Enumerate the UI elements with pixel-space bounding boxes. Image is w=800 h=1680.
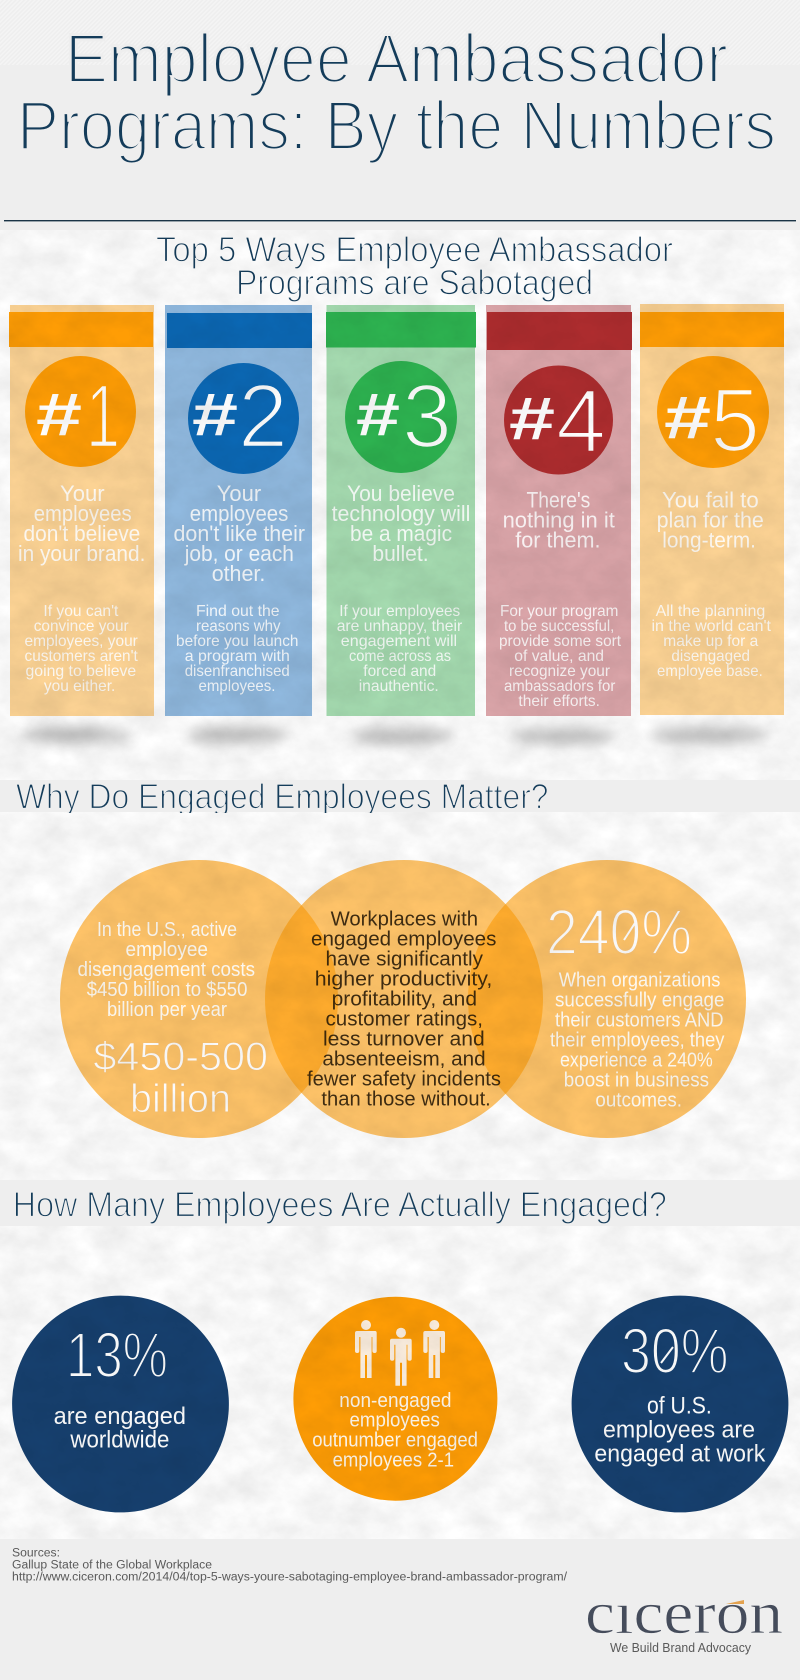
venn right text: boost in business bbox=[564, 1070, 709, 1092]
number badge 2 bbox=[192, 367, 288, 467]
venn right text: 240% bbox=[546, 896, 692, 968]
body 1: customers aren't bbox=[24, 648, 138, 665]
headline 1 bbox=[18, 481, 145, 566]
body 4: of value, and bbox=[514, 648, 604, 665]
number badge 1: # bbox=[36, 381, 82, 448]
stat caption: employees 2-1 bbox=[333, 1449, 454, 1472]
headline 4: nothing in it bbox=[503, 508, 615, 533]
heading: top 5 ways: Programs are Sabotaged bbox=[236, 264, 593, 303]
headline 5 bbox=[657, 488, 764, 553]
body 2: employees. bbox=[198, 678, 276, 695]
venn left text: billion bbox=[130, 1077, 231, 1121]
body 5: make up for a bbox=[663, 633, 758, 650]
venn centre text: less turnover and bbox=[323, 1029, 485, 1051]
panel: #2 employees don't like their job bbox=[165, 305, 312, 716]
number badge 5 bbox=[664, 371, 760, 471]
number badge 4: # bbox=[509, 385, 555, 452]
headline 4: There's bbox=[526, 488, 590, 513]
headline 3: technology will bbox=[332, 501, 470, 526]
logo: ciceron bbox=[588, 1600, 782, 1654]
heading: how many engaged: How Many Employees Are Actually Engaged? bbox=[13, 1185, 667, 1224]
stat circle: 30%: engaged at work bbox=[594, 1441, 766, 1468]
number badge 1 bbox=[36, 367, 120, 467]
body 1: employees, your bbox=[24, 633, 138, 650]
venn right text: their employees, they bbox=[550, 1030, 724, 1052]
body 2: Find out the bbox=[196, 603, 280, 620]
body 4: provide some sort bbox=[499, 633, 622, 650]
body 4: For your program bbox=[500, 603, 618, 620]
body 2: before you launch bbox=[176, 633, 298, 650]
body 4: to be successful, bbox=[504, 618, 614, 635]
venn centre text: have significantly bbox=[326, 949, 483, 971]
body 4: ambassadors for bbox=[504, 678, 616, 695]
heading: top 5 ways: Top 5 Ways Employee Ambassador bbox=[156, 231, 673, 270]
number badge 5: # bbox=[664, 384, 711, 451]
venn right text: outcomes. bbox=[595, 1090, 682, 1112]
stat circle: 30%: of U.S. bbox=[647, 1392, 712, 1419]
stat caption bbox=[312, 1389, 478, 1472]
venn centre text: engaged employees bbox=[311, 929, 496, 951]
headline 4: for them. bbox=[515, 528, 600, 553]
number badge 3: 3 bbox=[402, 367, 452, 467]
logo: ciceron: ciceron bbox=[585, 1580, 783, 1646]
headline 1: don't believe bbox=[24, 521, 140, 546]
headline 5: plan for the bbox=[657, 508, 764, 533]
headline 3: be a magic bbox=[350, 521, 452, 546]
body 2: reasons why bbox=[196, 618, 281, 635]
venn left text: employee bbox=[126, 939, 208, 961]
venn left text: $450 billion to $550 bbox=[87, 979, 247, 1001]
venn diagram bbox=[60, 860, 746, 1138]
venn right text bbox=[546, 896, 724, 1112]
headline 3 bbox=[332, 481, 470, 566]
number badge 4 bbox=[509, 372, 606, 472]
stat circle: 13%: worldwide bbox=[69, 1427, 169, 1454]
headline 5: You fail to bbox=[662, 488, 759, 513]
body 5 bbox=[652, 603, 772, 680]
venn centre text: higher productivity, bbox=[315, 969, 492, 991]
sources: Gallup State of the Global Workplace bbox=[12, 1560, 212, 1572]
body 3: inauthentic. bbox=[359, 678, 439, 695]
heading: top 5 ways bbox=[156, 231, 673, 303]
stat caption: employees bbox=[350, 1409, 440, 1432]
venn centre text: than those without. bbox=[321, 1089, 491, 1111]
headline 3: bullet. bbox=[372, 541, 429, 566]
body 1 bbox=[24, 603, 138, 695]
body 3 bbox=[337, 603, 463, 695]
stat circle: non-engaged 2-1 bbox=[293, 1297, 497, 1501]
body 3: If your employees bbox=[339, 603, 460, 620]
body 5: employee base. bbox=[657, 663, 763, 680]
venn centre text bbox=[307, 909, 501, 1111]
title bbox=[17, 20, 776, 164]
headline 2: job, or each bbox=[184, 541, 294, 566]
body 3: come across as bbox=[349, 648, 451, 665]
body 4 bbox=[499, 603, 622, 710]
venn right text: successfully engage bbox=[555, 990, 724, 1012]
icon: three employees bbox=[355, 1320, 445, 1386]
number badge 2: # bbox=[192, 381, 238, 448]
body 4: their efforts. bbox=[518, 693, 600, 710]
venn centre text: profitability, and bbox=[332, 989, 477, 1011]
venn left text: disengagement costs bbox=[78, 959, 255, 981]
venn left text: billion per year bbox=[107, 999, 227, 1021]
stat circle: 30%: 30% bbox=[621, 1315, 729, 1387]
column shadows bbox=[20, 727, 770, 744]
venn centre text: customer ratings, bbox=[326, 1009, 483, 1031]
paper texture overlay bbox=[0, 230, 800, 1540]
body 1: going to believe bbox=[26, 663, 136, 680]
body 5: All the planning bbox=[656, 603, 765, 620]
number badge 3 bbox=[356, 367, 452, 467]
number badge 3: # bbox=[356, 381, 400, 448]
venn centre text: absenteeism, and bbox=[322, 1049, 486, 1071]
body 4: recognize your bbox=[509, 663, 611, 680]
body 2: disenfranchised bbox=[185, 663, 290, 680]
panel: #1 your employees don't believe bbox=[9, 305, 154, 716]
body 1: you either. bbox=[44, 678, 115, 695]
headline 2 bbox=[174, 481, 305, 586]
venn left text: In the U.S., active bbox=[97, 919, 237, 941]
stat caption: outnumber engaged bbox=[312, 1429, 478, 1452]
headline 2: don't like their bbox=[174, 521, 305, 546]
stat circle: 30% bbox=[572, 1296, 788, 1512]
stat caption: non-engaged bbox=[339, 1389, 452, 1412]
sources: Sources: bbox=[12, 1548, 60, 1560]
number badge 1: 1 bbox=[86, 367, 120, 467]
panel: #4 nothing in it for them bbox=[486, 305, 632, 716]
number badge 2: 2 bbox=[238, 367, 288, 467]
sources bbox=[12, 1548, 568, 1584]
stat circle: 13%: 13% bbox=[66, 1319, 168, 1391]
venn left text: $450-500 bbox=[93, 1035, 268, 1079]
venn right text: When organizations bbox=[559, 970, 720, 992]
stat circle: 30%: employees are bbox=[603, 1416, 755, 1443]
headline 4 bbox=[503, 488, 615, 553]
headline 2: Your bbox=[217, 481, 261, 506]
venn right text: experience a 240% bbox=[560, 1050, 713, 1072]
number badge 5: 5 bbox=[710, 371, 760, 471]
panel: #3 technology magic bullet bbox=[326, 305, 476, 716]
venn left text bbox=[78, 919, 268, 1121]
heading: why engaged employees matter: Why Do Engaged Employees Matter? bbox=[16, 778, 548, 817]
body 2: a program with bbox=[185, 648, 290, 665]
panel: #5 fail to plan long-term bbox=[640, 304, 784, 715]
venn right text: their customers AND bbox=[555, 1010, 724, 1032]
title rule bbox=[4, 220, 796, 221]
sources: http://www.ciceron.com/2014/04/top-5-ways-youre-sabotaging-employee-brand-ambassador-program/ bbox=[12, 1572, 568, 1584]
body 1: convince your bbox=[34, 618, 129, 635]
body 5: disengaged bbox=[671, 648, 750, 665]
body 3: are unhappy, their bbox=[337, 618, 463, 635]
stat circle: 13%: are engaged bbox=[54, 1403, 186, 1430]
headline 2: employees bbox=[190, 501, 288, 526]
headline 2: other. bbox=[212, 561, 265, 586]
headline 5: long-term. bbox=[662, 528, 756, 553]
logo: ciceron: We Build Brand Advocacy bbox=[610, 1640, 751, 1655]
title: Employee Ambassador bbox=[65, 20, 728, 98]
stat circle: 13% bbox=[12, 1296, 229, 1512]
headline 1: employees bbox=[34, 501, 132, 526]
body 1: If you can't bbox=[43, 603, 119, 620]
body 3: forced and bbox=[363, 663, 436, 680]
number badge 4: 4 bbox=[556, 372, 606, 472]
venn centre text: fewer safety incidents bbox=[307, 1069, 501, 1091]
headline 1: in your brand. bbox=[18, 541, 145, 566]
body 2 bbox=[176, 603, 298, 695]
body 5: in the world can't bbox=[652, 618, 772, 635]
headline 3: You believe bbox=[347, 481, 455, 506]
venn centre text: Workplaces with bbox=[331, 909, 478, 931]
body 3: engagement will bbox=[341, 633, 457, 650]
headline 1: Your bbox=[60, 481, 105, 506]
